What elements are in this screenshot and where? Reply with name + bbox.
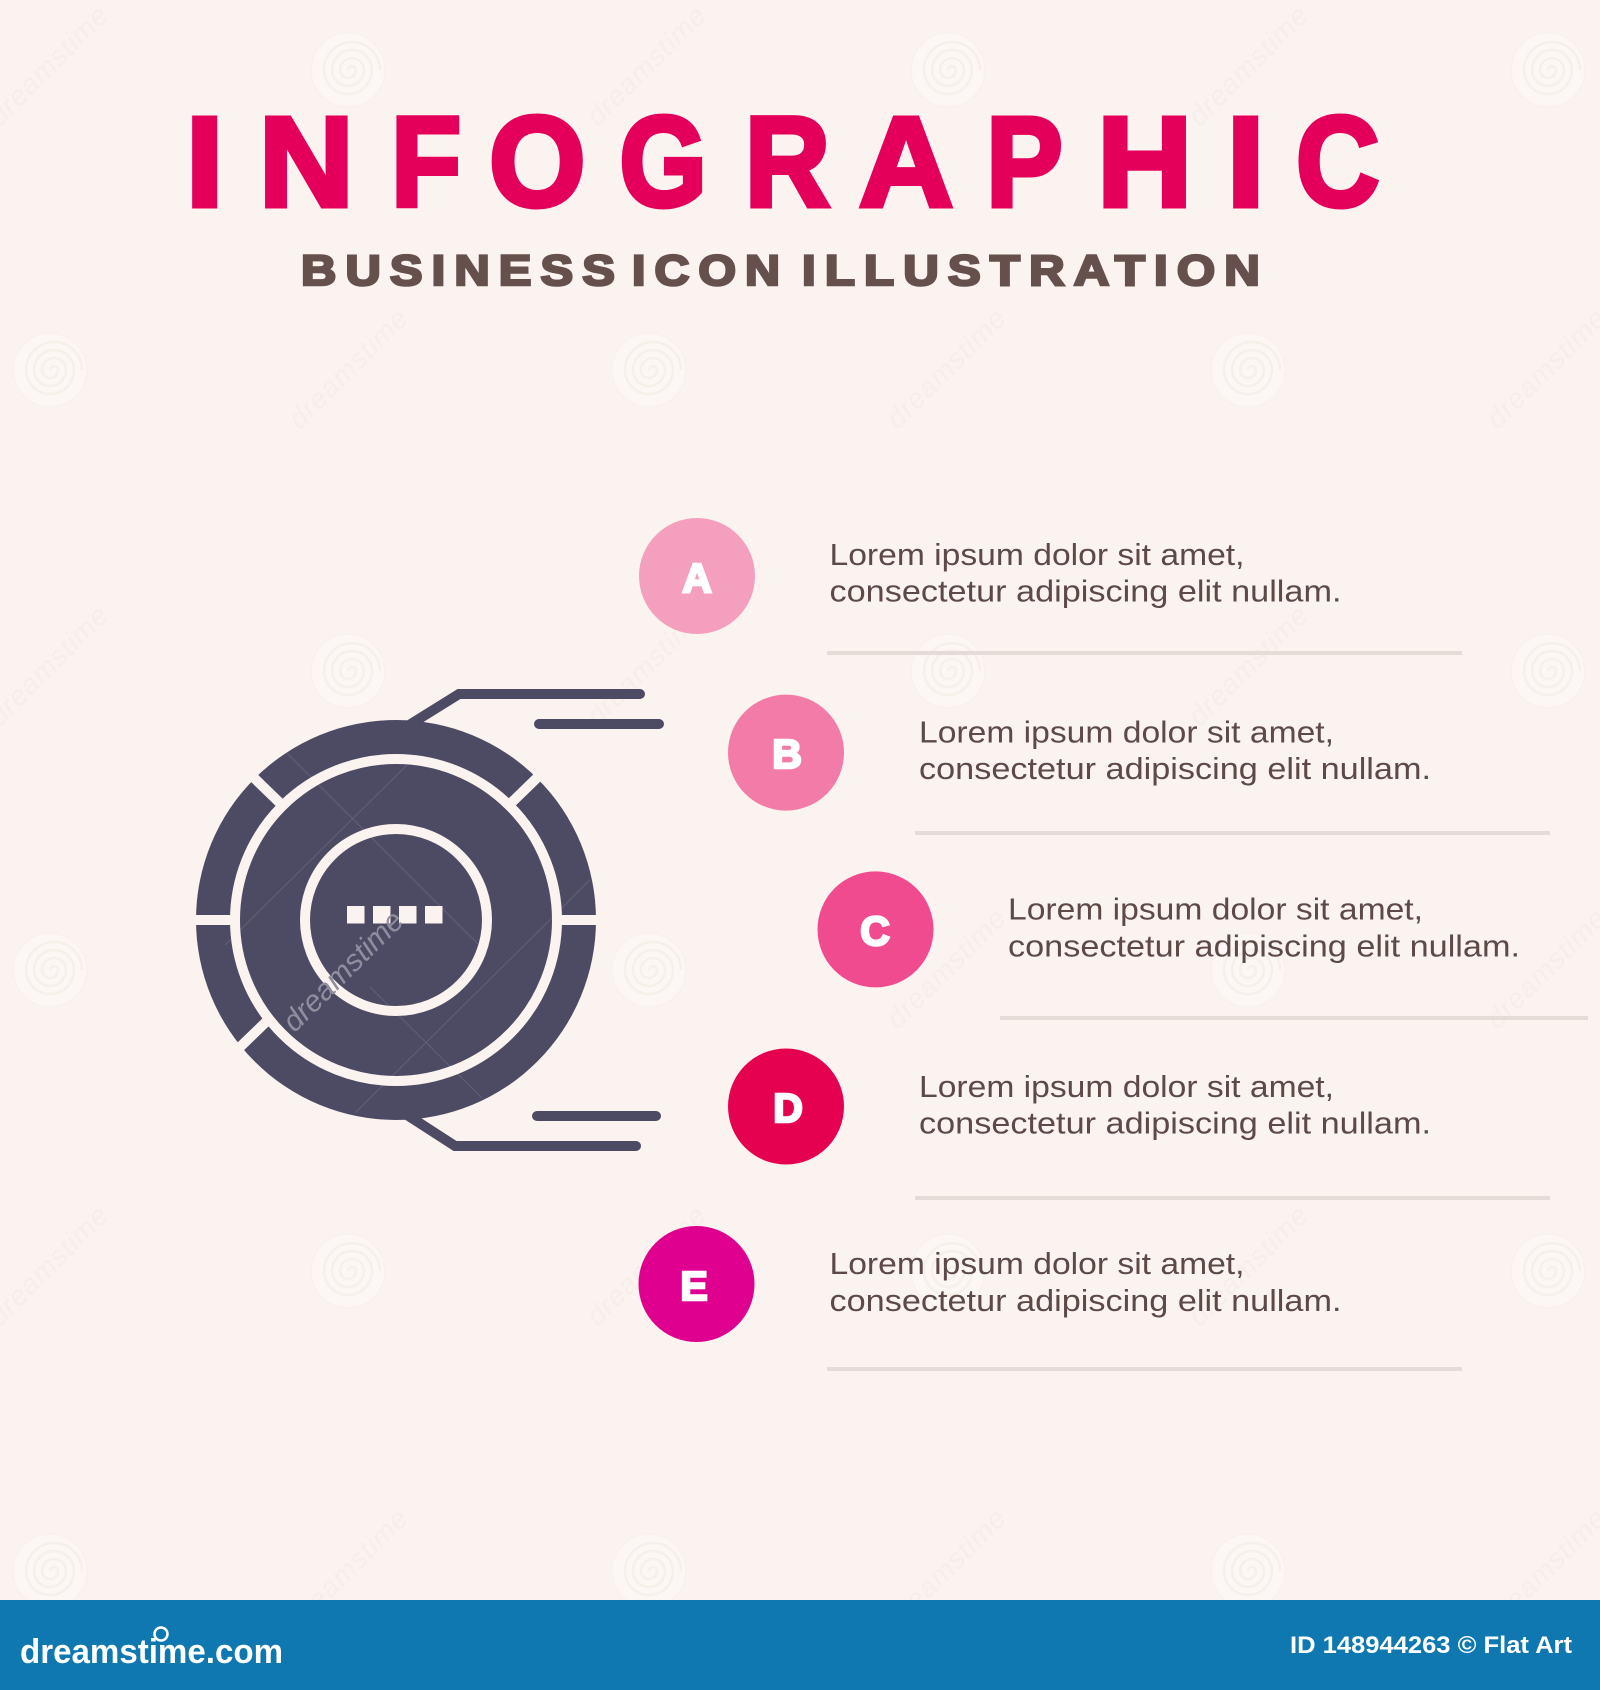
- divider A: [827, 651, 1462, 655]
- text A: [830, 538, 1342, 609]
- text C: [1008, 893, 1520, 963]
- title: INFOGRAPHIC: O: [489, 91, 586, 234]
- title: INFOGRAPHIC: F: [391, 91, 461, 234]
- text D: [919, 1070, 1431, 1141]
- subtitle: ILLUSTRATION: [802, 247, 1269, 295]
- watermark text: dreamstime: [880, 902, 1012, 1034]
- title: INFOGRAPHIC: A: [859, 91, 953, 234]
- icon: segmented circle with leader lines: [186, 694, 659, 1146]
- divider D: [915, 1196, 1550, 1200]
- watermark text: dreamstime: [1182, 599, 1314, 731]
- divider C: [1000, 1016, 1588, 1020]
- text E: consectetur adipiscing elit nullam.: [830, 1284, 1342, 1318]
- watermark text: dreamstime: [880, 302, 1012, 434]
- item D: [728, 1048, 1550, 1200]
- subtitle: BUSINESS: [301, 247, 624, 295]
- outer disc: [196, 720, 596, 1120]
- icon watermark text: dreamstime: [276, 904, 410, 1038]
- badge D: [728, 1048, 844, 1164]
- subtitle: [301, 247, 1269, 295]
- text B: Lorem ipsum dolor sit amet,: [919, 715, 1334, 749]
- logo spiral: [154, 1628, 168, 1640]
- footer bar: [0, 1600, 1600, 1690]
- watermark text: dreamstime: [580, 1199, 712, 1331]
- item E: [638, 1226, 1462, 1371]
- badge A: [639, 518, 755, 634]
- item C: [818, 871, 1588, 1020]
- letter E: E: [680, 1263, 708, 1309]
- divider B: [915, 831, 1550, 835]
- watermark text: dreamstime: [580, 0, 712, 131]
- title: INFOGRAPHIC: N: [259, 91, 354, 234]
- title: INFOGRAPHIC: C: [1296, 91, 1379, 234]
- item B: [728, 695, 1550, 835]
- footer credit: ID 148944263 © Flat Art: [1290, 1632, 1572, 1659]
- text D: Lorem ipsum dolor sit amet,: [919, 1070, 1334, 1104]
- title: INFOGRAPHIC: R: [745, 91, 830, 234]
- badge B: [728, 695, 844, 811]
- divider E: [827, 1367, 1462, 1371]
- text E: [830, 1247, 1342, 1318]
- letter B: B: [772, 731, 802, 777]
- title: INFOGRAPHIC: G: [619, 91, 707, 234]
- title: INFOGRAPHIC: I: [1227, 91, 1265, 234]
- text C: consectetur adipiscing elit nullam.: [1008, 929, 1520, 963]
- badge E: [638, 1226, 754, 1342]
- watermark text: dreamstime: [282, 1502, 414, 1634]
- ring gaps: [186, 759, 606, 1081]
- leader lines: [404, 694, 659, 1146]
- center squares: [347, 906, 442, 924]
- text A: consectetur adipiscing elit nullam.: [830, 575, 1342, 609]
- text B: consectetur adipiscing elit nullam.: [919, 752, 1431, 786]
- badge C: [818, 871, 934, 987]
- watermark text: dreamstime: [880, 1502, 1012, 1634]
- item A: [639, 518, 1462, 655]
- watermark text: dreamstime: [1182, 0, 1314, 131]
- letter D: D: [773, 1085, 803, 1131]
- text A: Lorem ipsum dolor sit amet,: [830, 538, 1244, 572]
- text C: Lorem ipsum dolor sit amet,: [1008, 893, 1423, 927]
- text D: consectetur adipiscing elit nullam.: [919, 1107, 1431, 1141]
- text E: Lorem ipsum dolor sit amet,: [830, 1247, 1244, 1281]
- title: INFOGRAPHIC: I: [186, 91, 224, 234]
- text B: [919, 715, 1431, 786]
- watermark text: dreamstime: [580, 599, 712, 731]
- footer logo: dreamstime.com: [20, 1633, 283, 1671]
- watermark text: dreamstime: [282, 302, 414, 434]
- title: INFOGRAPHIC: H: [1097, 91, 1192, 234]
- letter C: C: [860, 908, 890, 954]
- title: INFOGRAPHIC: [186, 91, 1379, 234]
- watermark text: dreamstime: [1182, 1199, 1314, 1331]
- letter A: A: [682, 555, 712, 601]
- title: INFOGRAPHIC: P: [986, 91, 1063, 234]
- subtitle: ICON: [632, 247, 789, 295]
